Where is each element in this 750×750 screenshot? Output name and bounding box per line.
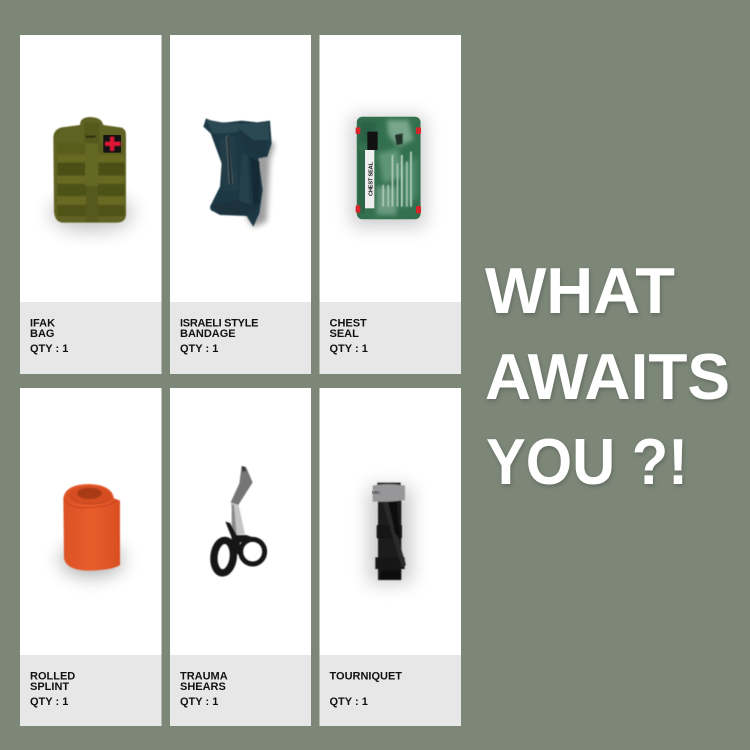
title: AWAITS xyxy=(485,340,730,413)
label: IFAK bag: IFAK xyxy=(30,318,55,330)
panel: chest seal xyxy=(320,35,461,374)
label: rolled splint xyxy=(30,670,75,708)
icon: chest seal xyxy=(352,117,425,227)
chest seal label: CHEST SEAL xyxy=(369,161,375,196)
icon: tourniquet xyxy=(368,483,412,583)
tourniquet time text: ME: xyxy=(372,490,381,496)
icon: trauma shears xyxy=(212,466,265,574)
label: trauma shears: SHEARS xyxy=(180,681,226,693)
label: Israeli style bandage: BANDAGE xyxy=(180,328,236,340)
label: rolled splint: SPLINT xyxy=(30,681,69,693)
label: tourniquet: TOURNIQUET xyxy=(330,670,402,682)
label: IFAK bag xyxy=(30,318,68,355)
label: tourniquet xyxy=(330,670,402,708)
label: Israeli style bandage: QTY : 1 xyxy=(180,343,218,355)
label: trauma shears: QTY : 1 xyxy=(180,696,218,708)
label: tourniquet: QTY : 1 xyxy=(330,696,368,708)
icon: rolled splint xyxy=(60,484,123,577)
label: chest seal: QTY : 1 xyxy=(330,343,368,355)
panel: trauma shears xyxy=(170,388,311,726)
label: rolled splint: QTY : 1 xyxy=(30,696,68,708)
icon: Israeli bandage xyxy=(203,118,275,227)
panel: Israeli style bandage xyxy=(170,35,311,374)
label: rolled splint: ROLLED xyxy=(30,670,75,682)
label: chest seal xyxy=(330,318,368,355)
label: chest seal: SEAL xyxy=(330,328,359,340)
label: chest seal: CHEST xyxy=(330,318,367,330)
panel: tourniquet xyxy=(320,388,461,726)
title: YOU ?! xyxy=(486,425,688,498)
panel: IFAK bag xyxy=(20,35,162,374)
panel: rolled splint xyxy=(20,388,162,726)
title: WHAT xyxy=(485,254,675,327)
icon: IFAK bag xyxy=(50,117,133,232)
title xyxy=(485,254,730,498)
label: trauma shears: TRAUMA xyxy=(180,670,228,682)
label: IFAK bag: BAG xyxy=(30,328,54,340)
label: IFAK bag: QTY : 1 xyxy=(30,343,68,355)
icon: red cross xyxy=(105,137,121,151)
label: trauma shears xyxy=(180,670,228,708)
label: Israeli style bandage xyxy=(180,318,258,355)
label: Israeli style bandage: ISRAELI STYLE xyxy=(180,318,258,330)
